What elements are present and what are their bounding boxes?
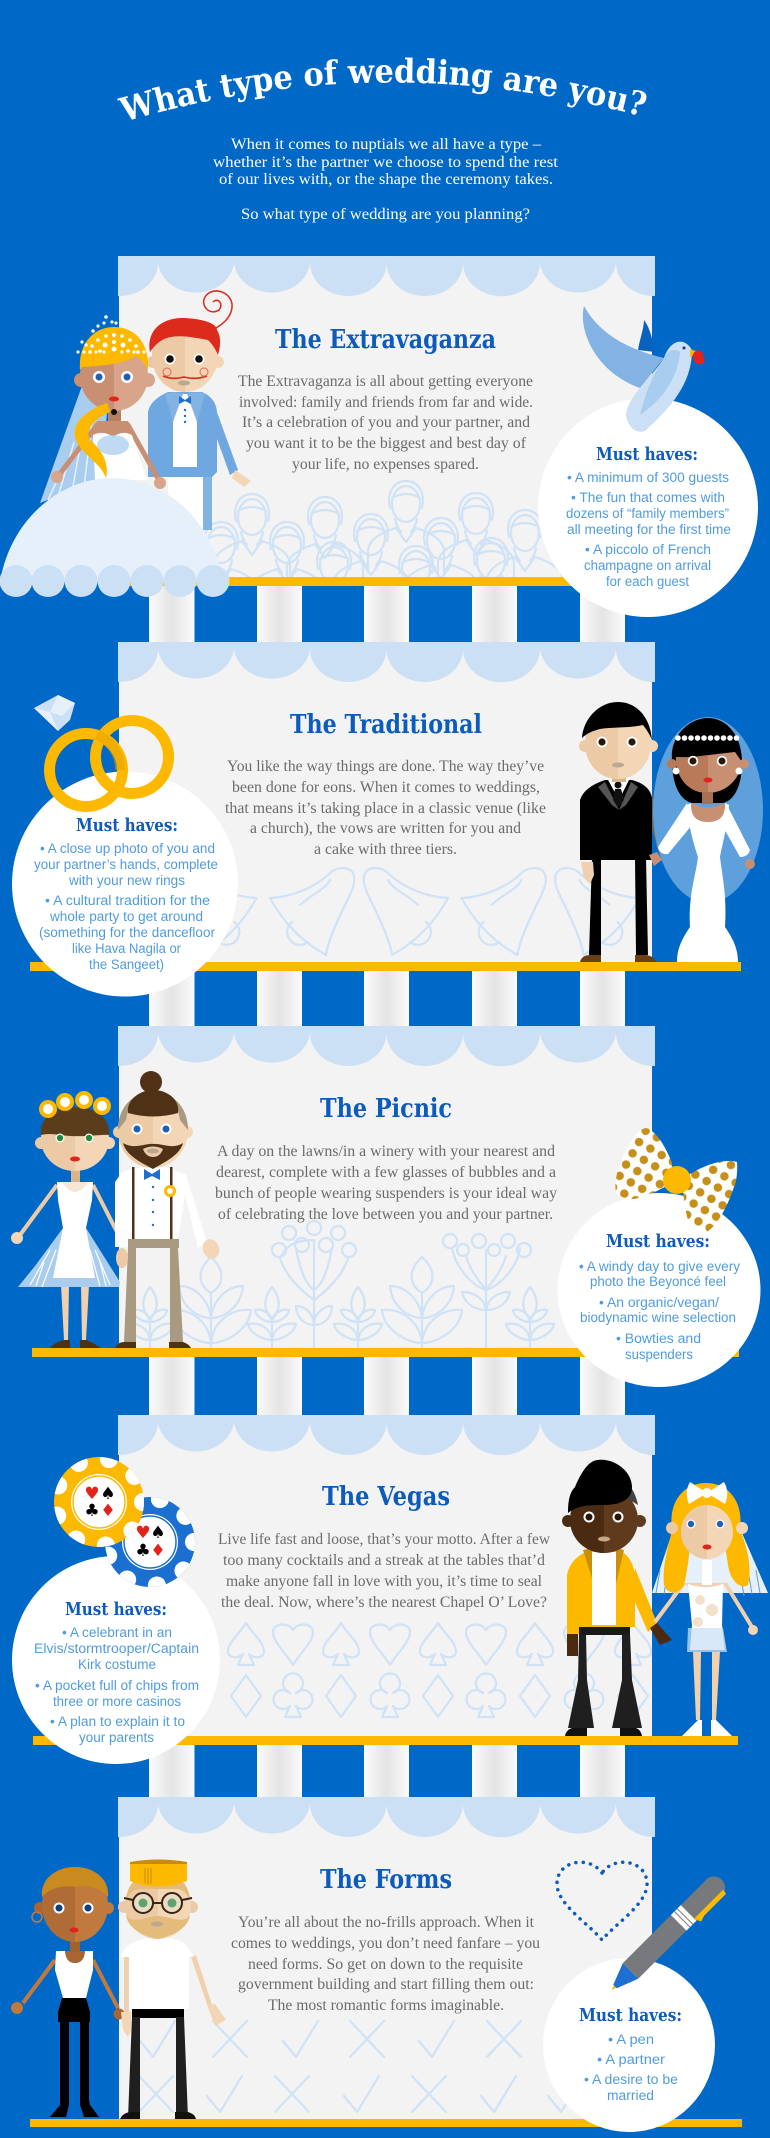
must haves list: • A desire to be: [584, 2072, 678, 2087]
columns: [149, 586, 625, 646]
bride: [649, 717, 763, 962]
icon: blue poker chip: ♠: [150, 1523, 166, 1543]
must haves list: • A piccolo of French: [585, 542, 711, 557]
must haves circle: [543, 1958, 715, 2132]
panel background: [119, 256, 652, 578]
scalloped awning: [118, 256, 655, 296]
must haves list: champagne on arrival: [584, 558, 711, 573]
must haves list: [584, 2032, 678, 2103]
must haves list: three or more casinos: [53, 1694, 181, 1709]
description: too many cocktails and a streak at the tables that’d: [223, 1552, 545, 1569]
must haves list: • An organic/vegan/: [599, 1295, 719, 1310]
must haves heading: Must haves:: [579, 2005, 682, 2026]
must haves heading: Must haves:: [76, 815, 178, 836]
must haves list: • A pen: [608, 2032, 654, 2047]
must haves list: • A plan to explain it to: [50, 1714, 185, 1729]
description: It’s a celebration of you and your partner, and: [242, 414, 530, 431]
columns: [149, 1744, 625, 1804]
must haves circle: [12, 772, 238, 996]
scalloped awning: [118, 642, 655, 682]
intro text: When it comes to nuptials we all have a type –: [231, 136, 541, 153]
groom: [562, 1460, 672, 1736]
stage bar: [120, 577, 660, 586]
heading: The Traditional: [290, 710, 482, 740]
icon: yellow poker chip: ♦: [100, 1501, 116, 1521]
description: your life, no expenses spared.: [292, 456, 479, 473]
description: dearest, complete with a few glasses of bubbles and a: [216, 1164, 556, 1181]
panel background: [119, 1415, 652, 1737]
card suits pattern: [228, 1623, 651, 1717]
must haves list: all meeting for the first time: [567, 522, 731, 537]
scalloped awning: [118, 1415, 655, 1455]
must haves list: • A partner: [597, 2052, 666, 2067]
icon: yellow poker chip: [54, 1457, 144, 1547]
must haves list: biodynamic wine selection: [580, 1310, 736, 1325]
panel: The Vegas: [12, 1415, 768, 1804]
must haves list: the Sangeet): [89, 957, 164, 972]
panel background: [119, 642, 652, 964]
intro text: So what type of wedding are you planning?: [241, 206, 530, 223]
icon: pen: [604, 1872, 732, 2001]
must haves heading: Must haves:: [65, 1599, 167, 1620]
description: that means it’s taking place in a classic venue (like: [225, 800, 546, 817]
heading: The Vegas: [322, 1482, 450, 1512]
must haves list: [579, 1259, 740, 1362]
groom: [113, 1071, 222, 1348]
icon: polka dot bow: [615, 1128, 737, 1232]
must haves list: • A close up photo of you and: [40, 841, 215, 856]
must haves heading: Must haves:: [606, 1231, 710, 1252]
must haves list: [566, 470, 731, 589]
stage bar: [33, 1736, 738, 1745]
panel background: [119, 1026, 652, 1349]
panel: The Picnic: [11, 1026, 760, 1417]
description: [225, 758, 546, 858]
description: you want it to be the biggest and best day of: [246, 435, 527, 452]
description: involved: family and friends from far and wide.: [239, 394, 533, 411]
columns: [149, 1357, 625, 1417]
stage bar: [30, 962, 741, 971]
must haves list: (something for the dancefloor: [39, 925, 215, 940]
crowd pattern: [204, 480, 563, 577]
description: The Extravaganza is all about getting everyone: [238, 373, 533, 390]
icon: yellow poker chip: ♣: [84, 1501, 100, 1521]
description: [231, 1914, 540, 2014]
scalloped awning: [118, 1797, 655, 1837]
intro text: whether it’s the partner we choose to spend the rest: [213, 154, 559, 171]
description: Live life fast and loose, that’s your motto. After a few: [218, 1531, 551, 1548]
description: make anyone fall in love with you, it’s time to seal: [226, 1573, 542, 1590]
must haves list: your parents: [79, 1730, 154, 1745]
description: a church), the vows are written for you and: [250, 820, 521, 837]
description: government building and start filling them out:: [238, 1976, 534, 1993]
must haves list: Elvis/stormtrooper/Captain: [34, 1641, 199, 1656]
stage bar: [32, 1348, 739, 1357]
description: a cake with three tiers.: [314, 841, 457, 858]
bride: [652, 1482, 768, 1736]
description: A day on the lawns/in a winery with your nearest and: [217, 1143, 555, 1160]
scalloped awning: [118, 1026, 655, 1066]
heading: The Forms: [320, 1865, 452, 1895]
icon: blue poker chip: [105, 1497, 195, 1587]
icon: blue poker chip: ♦: [150, 1541, 166, 1561]
must haves list: Kirk costume: [78, 1657, 156, 1672]
must haves list: [34, 841, 218, 972]
must haves circle: [538, 398, 758, 617]
icon: diamond rings: [34, 695, 168, 806]
must haves circle: [12, 1556, 220, 1764]
bride: [11, 1867, 124, 2117]
icon: yellow poker chip: ♥: [84, 1484, 100, 1504]
description: [218, 1531, 551, 1611]
must haves list: whole party to get around: [49, 909, 203, 924]
must haves list: • A windy day to give every: [579, 1259, 740, 1274]
icon: blue poker chip: ♣: [135, 1541, 151, 1561]
groom: [118, 1860, 226, 2119]
description: been done for eons. When it comes to weddings,: [232, 779, 540, 796]
must haves list: • A cultural tradition for the: [45, 893, 210, 908]
checks and crosses pattern: [139, 2021, 583, 2112]
bells pattern: [172, 868, 640, 955]
title: What type of wedding are you?: [117, 58, 646, 120]
description: You’re all about the no-frills approach. When it: [238, 1914, 535, 1931]
description: [215, 1143, 557, 1223]
description: need forms. So get on down to the requisite: [248, 1956, 523, 1973]
icon: dove: [583, 306, 705, 432]
must haves list: • The fun that comes with: [571, 490, 725, 505]
description: [238, 373, 533, 473]
icon: dotted heart: [557, 1862, 647, 1940]
must haves list: [34, 1625, 199, 1745]
description: The most romantic forms imaginable.: [268, 1997, 504, 2014]
skirt: [0, 478, 223, 582]
description: bunch of people wearing suspenders is your ideal way: [215, 1185, 557, 1202]
bride: [0, 315, 230, 597]
must haves list: photo the Beyoncé feel: [590, 1274, 726, 1289]
must haves list: like Hava Nagila or: [72, 941, 181, 956]
description: comes to weddings, you don’t need fanfare – you: [231, 1935, 540, 1952]
icon: blue poker chip: ♥: [135, 1523, 151, 1543]
heading: The Extravaganza: [275, 325, 496, 355]
must haves list: with your new rings: [68, 873, 185, 888]
flowers pattern: [126, 1221, 554, 1348]
stage bar: [30, 2119, 742, 2127]
panel: The Traditional: [12, 642, 763, 1031]
must haves list: suspenders: [625, 1347, 693, 1362]
must haves heading: Must haves:: [596, 444, 698, 465]
groom: [147, 291, 251, 539]
must haves circle: [558, 1193, 760, 1387]
must haves list: your partner’s hands, complete: [34, 857, 218, 872]
description: You like the way things are done. The way they’ve: [227, 758, 544, 775]
intro text: of our lives with, or the shape the ceremony takes.: [219, 171, 553, 188]
panel: The Extravaganza: [0, 256, 758, 646]
must haves list: for each guest: [606, 574, 689, 589]
description: of celebrating the love between you and your partner.: [218, 1206, 553, 1223]
heading: The Picnic: [320, 1094, 452, 1124]
panel: The Forms: [11, 1797, 742, 2132]
groom: [579, 702, 685, 962]
must haves list: dozens of “family members”: [566, 506, 729, 521]
must haves list: married: [607, 2088, 654, 2103]
must haves list: • A pocket full of chips from: [35, 1678, 199, 1693]
must haves list: • Bowties and: [616, 1331, 701, 1346]
must haves list: • A celebrant in an: [62, 1625, 172, 1640]
icon: yellow poker chip: ♠: [100, 1484, 116, 1504]
must haves list: • A minimum of 300 guests: [567, 470, 729, 485]
columns: [149, 971, 625, 1031]
intro text: [213, 136, 559, 223]
bride: [11, 1091, 120, 1348]
panel background: [119, 1797, 652, 2120]
description: the deal. Now, where’s the nearest Chapel O’ Love?: [221, 1594, 547, 1611]
